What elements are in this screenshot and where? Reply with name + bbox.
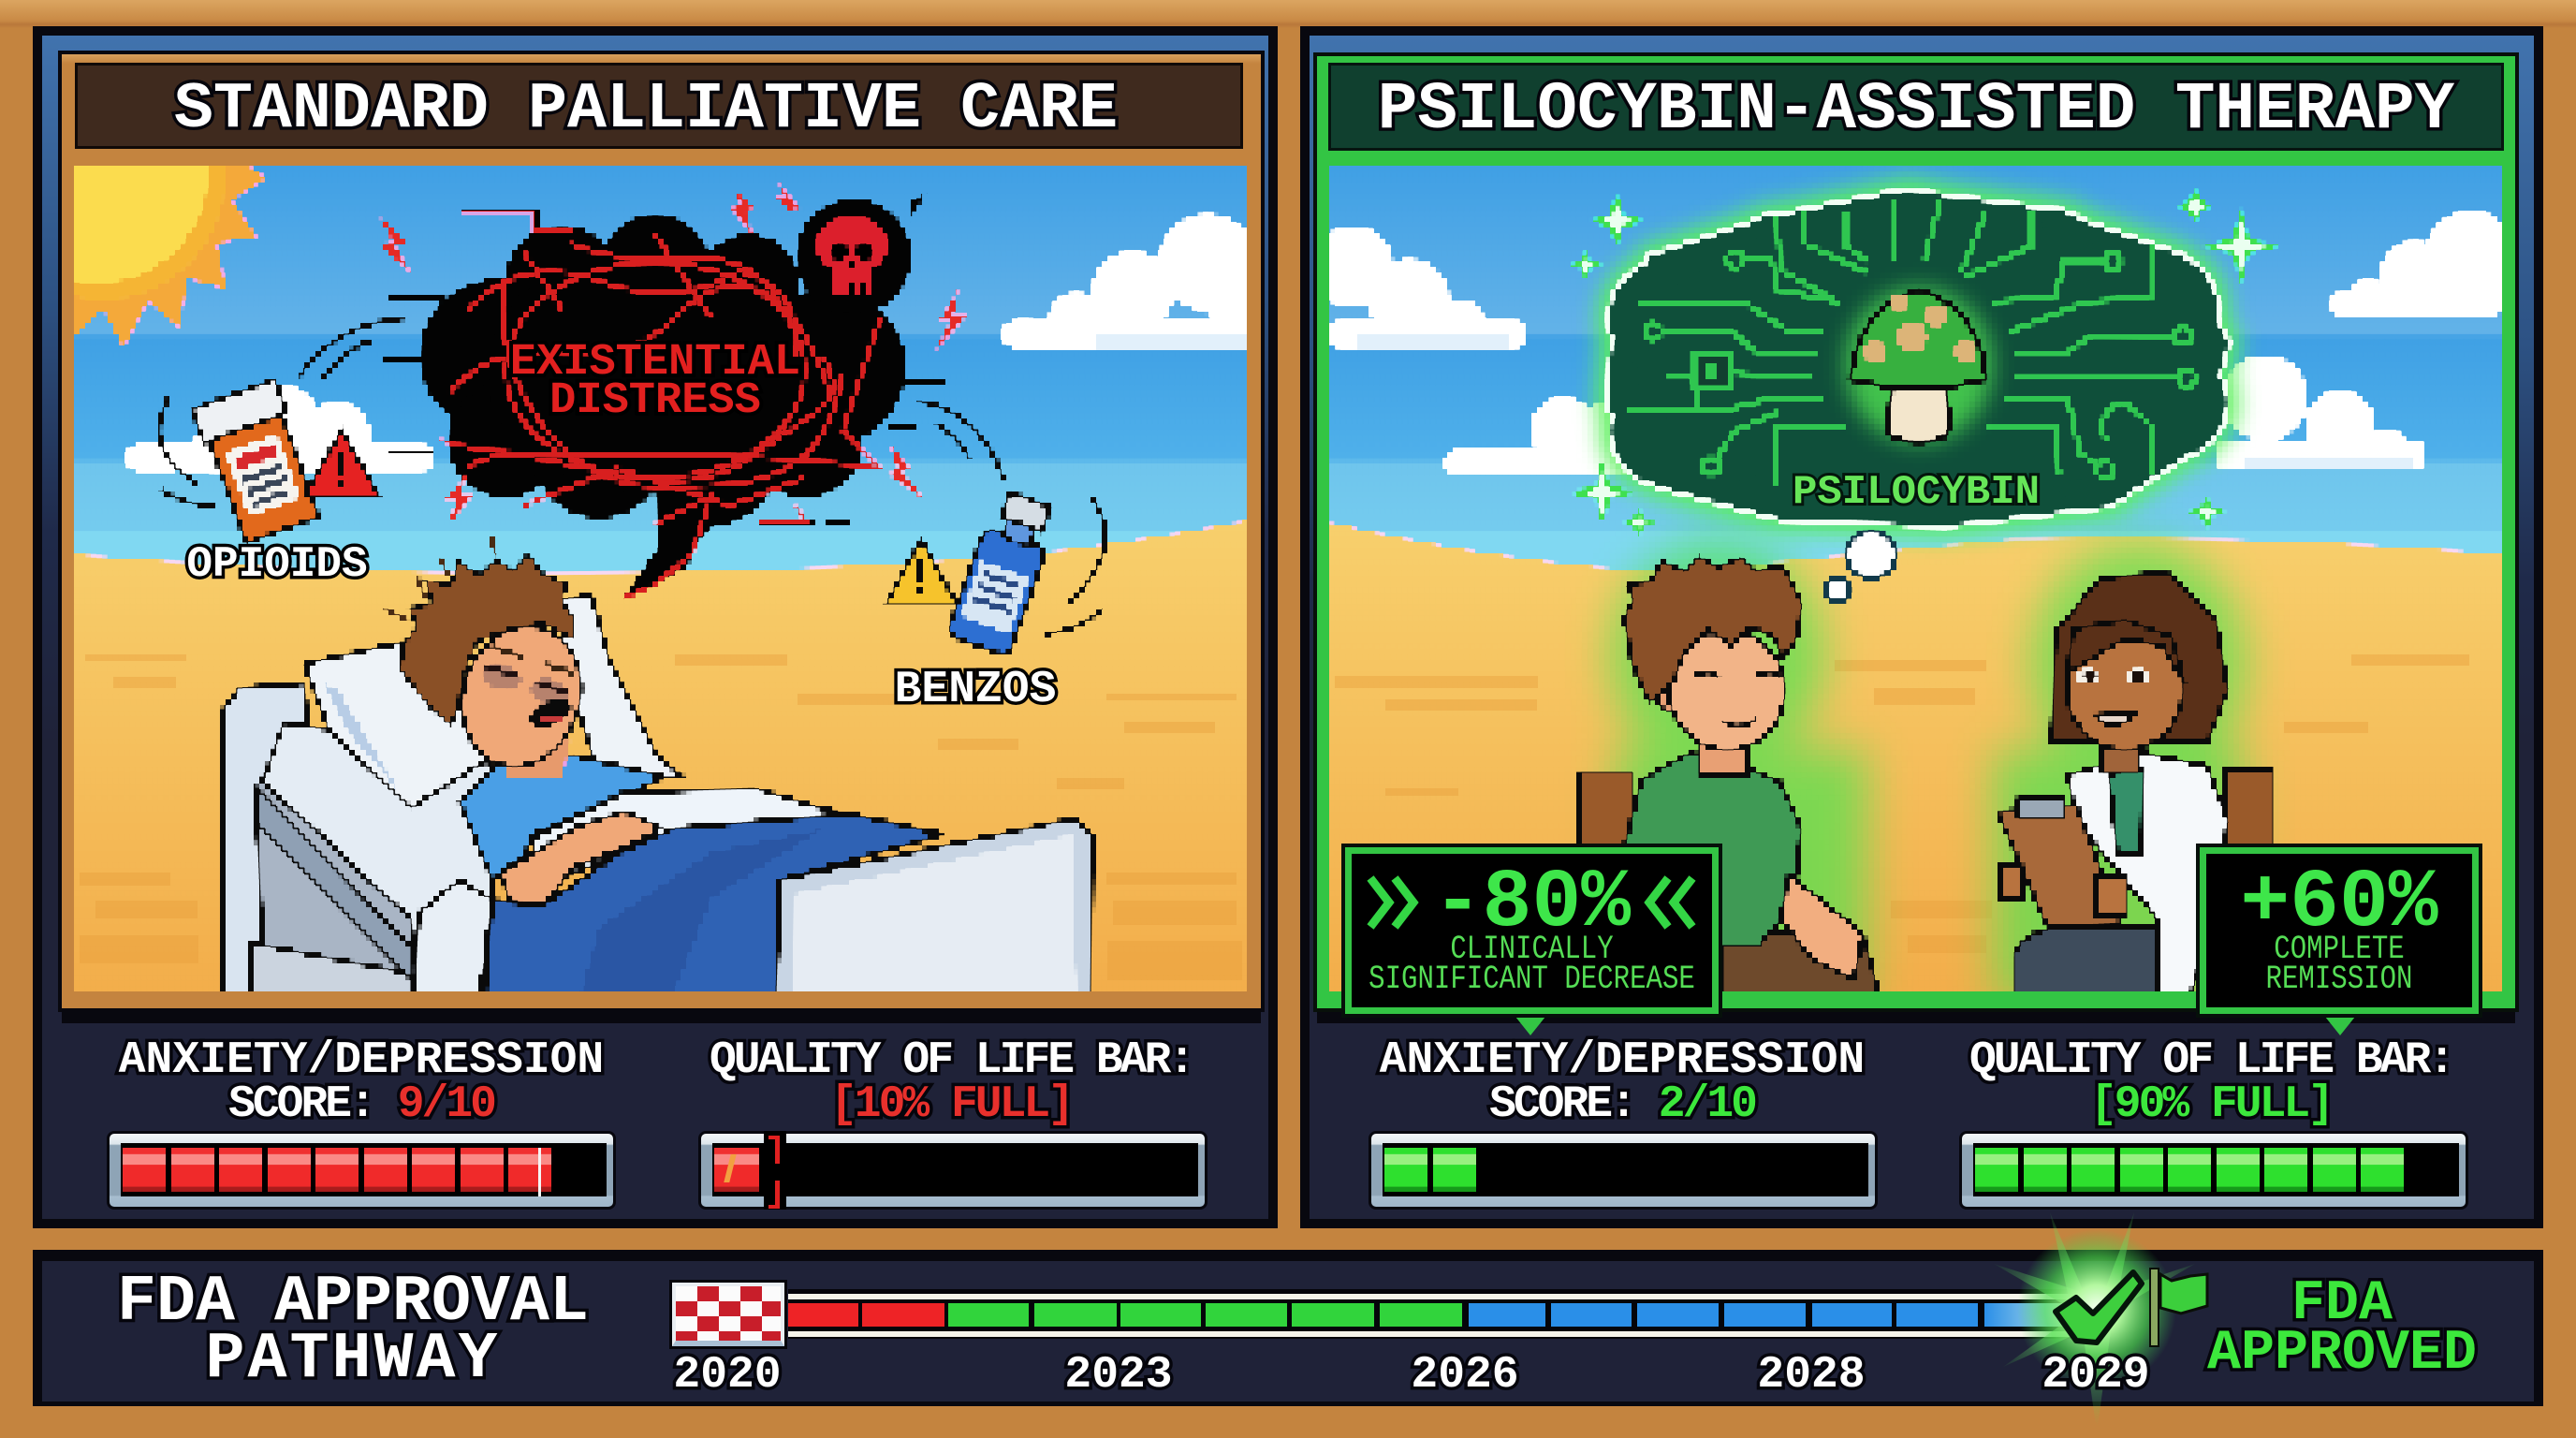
figure: blanket and arm (485, 788, 944, 993)
label: existential distress: EXISTENTIAL (510, 338, 800, 388)
callout: minus 80 percent: -80% (1433, 858, 1631, 950)
text block: right anxiety score: ANXIETY/DEPRESSION SCORE: 2/10 (1380, 1035, 1865, 1130)
label: fda approved: FDA APPROVED (2207, 1272, 2477, 1386)
flag (2150, 1269, 2207, 1346)
callout: plus 60 percent (2196, 844, 2482, 1035)
panel: psilocybin-assisted therapy (1300, 26, 2543, 1228)
figure: therapist (1998, 572, 2273, 993)
callout: plus 60 percent: +60% (2240, 858, 2438, 950)
icon: sun (0, 56, 267, 348)
icon: opioid pill bottle (159, 318, 404, 545)
callout: plus 60 percent: COMPLETE REMISSION (2266, 931, 2412, 998)
icon: skull (816, 216, 887, 295)
progress bar: right anxiety 2 of 10 (1368, 1131, 1878, 1210)
bubble glow (1608, 191, 2228, 525)
figure: distressed patient (384, 538, 666, 880)
heading: fda approval pathway: FDA APPROVAL PATHWAY (117, 1266, 589, 1397)
icon: pillow (304, 595, 683, 808)
heading: standard palliative care: STANDARD PALLIATIVE CARE (174, 73, 1118, 147)
check mark (2056, 1272, 2142, 1343)
callout: minus 80 percent: CLINICALLY SIGNIFICANT DECREASE (1368, 931, 1695, 998)
illustration: psilocybin session scene (1329, 166, 2502, 991)
label: opioids: OPIOIDS (186, 540, 368, 589)
label: benzos: BENZOS (895, 665, 1056, 715)
callout: minus 80 percent (1341, 844, 1722, 1035)
axis label: 2029: 2029 (2042, 1350, 2150, 1401)
panel: fda timeline (33, 1250, 2543, 1406)
background: sand dunes (1329, 522, 2502, 993)
axis label: 2020: 2020 (673, 1350, 782, 1401)
icon: existential distress cloud (378, 183, 968, 599)
text block: left anxiety score: ANXIETY/DEPRESSION SCORE: 9/10 (119, 1035, 604, 1130)
progress bar: left anxiety 9 of 10 (107, 1131, 616, 1210)
icon: approval burst, check mark and flag (1996, 1213, 2209, 1416)
icon: sparkles (1574, 192, 2272, 534)
glow around figures (1610, 538, 2247, 1002)
icon: benzodiazepine bottle (886, 401, 1105, 657)
motion lines (159, 318, 404, 506)
motion lines (915, 401, 1105, 634)
timeline track (788, 1289, 2080, 1339)
icon: microchip (1694, 354, 1730, 389)
background: sand dunes (74, 521, 1247, 993)
header frame: standard palliative care (62, 54, 1261, 1008)
progress bar: right quality of life 90 percent (1959, 1131, 2468, 1210)
icon: checkered start flag (672, 1283, 784, 1346)
label: distress: DISTRESS (549, 376, 761, 426)
figure: calm patient (1579, 557, 1879, 993)
icon: cloud behind pill bottle (125, 385, 434, 473)
icon: hospital bed (222, 683, 534, 993)
circuit traces (1625, 200, 2187, 486)
icon: red sparks (378, 183, 968, 526)
text block: right quality of life: QUALITY OF LIFE BAR: [90% FULL] (1969, 1035, 2452, 1130)
tangled red lines (440, 212, 880, 599)
label: psilocybin: PSILOCYBIN (1793, 469, 2040, 516)
thought dots (1846, 531, 1896, 578)
axis label: 2023: 2023 (1064, 1350, 1173, 1401)
panel: standard palliative care (33, 26, 1278, 1228)
progress bar: left quality of life 10 percent (698, 1131, 1208, 1210)
axis label: 2026: 2026 (1411, 1350, 1519, 1401)
icon: thought bubble (1608, 191, 2228, 602)
icon: bed footboard (776, 818, 1092, 993)
text block: left quality of life: QUALITY OF LIFE BAR: [10% FULL] (710, 1035, 1193, 1130)
heading: psilocybin-assisted therapy: PSILOCYBIN-ASSISTED THERAPY (1378, 73, 2454, 148)
icon: cloud right (1002, 213, 1304, 348)
header frame: psilocybin therapy (1317, 56, 2515, 1008)
icon: mushroom (1846, 288, 1992, 442)
icon: clouds (1311, 211, 2518, 477)
illustration: palliative care scene (74, 166, 1247, 991)
axis label: 2028: 2028 (1757, 1350, 1866, 1401)
